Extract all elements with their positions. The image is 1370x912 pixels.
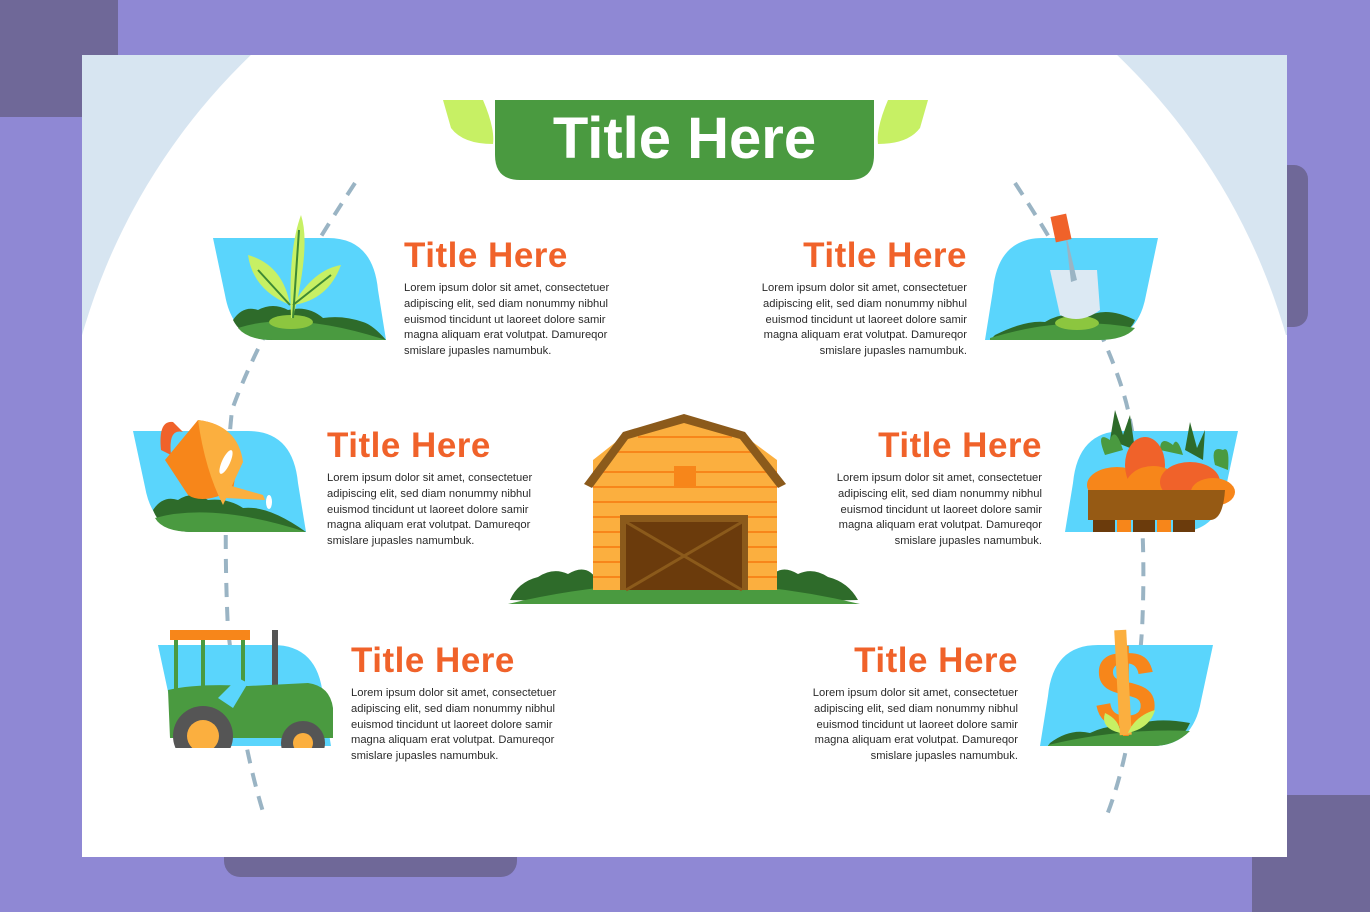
header banner: Title Here	[553, 106, 816, 171]
text block 3: Lorem ipsum dolor sit amet, consectetuer	[327, 472, 532, 484]
text block 4	[837, 426, 1042, 547]
text block 5: Lorem ipsum dolor sit amet, consectetuer	[351, 687, 556, 699]
text block 1: magna aliquam erat volutpat. Damureqor	[404, 329, 607, 341]
icon: sprout	[213, 215, 386, 340]
text block 2: adipiscing elit, sed diam nonummy nibhul	[763, 298, 967, 310]
text block 5: smislare jupasles namumbuk.	[351, 750, 498, 762]
text block 5: adipiscing elit, sed diam nonummy nibhul	[351, 703, 555, 715]
text block 2: euismod tincidunt ut laoreet dolore samir	[766, 314, 967, 326]
text block 4: Lorem ipsum dolor sit amet, consectetuer	[837, 472, 1042, 484]
text block 2	[762, 236, 967, 357]
text block 1: Title Here	[404, 236, 568, 275]
icon: watering can	[133, 420, 306, 532]
icon: carrots crate	[1065, 410, 1238, 532]
text block 4: euismod tincidunt ut laoreet dolore samir	[841, 504, 1042, 516]
icon: shovel	[985, 214, 1158, 340]
text block 3: smislare jupasles namumbuk.	[327, 535, 474, 547]
text block 6: smislare jupasles namumbuk.	[871, 750, 1018, 762]
text block 1: Lorem ipsum dolor sit amet, consectetuer	[404, 282, 609, 294]
text block 1: smislare jupasles namumbuk.	[404, 345, 551, 357]
text block 1: euismod tincidunt ut laoreet dolore samir	[404, 314, 605, 326]
text block 6	[813, 641, 1018, 762]
text block 5: magna aliquam erat volutpat. Damureqor	[351, 734, 554, 746]
text block 4: magna aliquam erat volutpat. Damureqor	[839, 519, 1042, 531]
text block 6: adipiscing elit, sed diam nonummy nibhul	[814, 703, 1018, 715]
text block 5: euismod tincidunt ut laoreet dolore samir	[351, 719, 552, 731]
barn	[508, 414, 860, 604]
text block 5	[351, 641, 556, 762]
text block 2: Title Here	[803, 236, 967, 275]
icon: dollar	[1040, 629, 1213, 748]
text block 6: euismod tincidunt ut laoreet dolore samir	[817, 719, 1018, 731]
text block 6: Lorem ipsum dolor sit amet, consectetuer	[813, 687, 1018, 699]
text block 4: Title Here	[878, 426, 1042, 465]
text block 3: euismod tincidunt ut laoreet dolore samir	[327, 504, 528, 516]
text block 2: smislare jupasles namumbuk.	[820, 345, 967, 357]
text block 1: adipiscing elit, sed diam nonummy nibhul	[404, 298, 608, 310]
text block 2: magna aliquam erat volutpat. Damureqor	[764, 329, 967, 341]
text block 1	[404, 236, 610, 357]
text block 3: Title Here	[327, 426, 491, 465]
text block 6: magna aliquam erat volutpat. Damureqor	[815, 734, 1018, 746]
icon: tractor	[158, 630, 333, 748]
text block 3	[327, 426, 532, 547]
text block 3: magna aliquam erat volutpat. Damureqor	[327, 519, 530, 531]
text block 3: adipiscing elit, sed diam nonummy nibhul	[327, 488, 531, 500]
text block 2: Lorem ipsum dolor sit amet, consectetuer	[762, 282, 967, 294]
header banner	[443, 100, 928, 180]
text block 4: adipiscing elit, sed diam nonummy nibhul	[838, 488, 1042, 500]
text block 5: Title Here	[351, 641, 515, 680]
main panel	[82, 55, 1287, 857]
text block 6: Title Here	[854, 641, 1018, 680]
text block 4: smislare jupasles namumbuk.	[895, 535, 1042, 547]
